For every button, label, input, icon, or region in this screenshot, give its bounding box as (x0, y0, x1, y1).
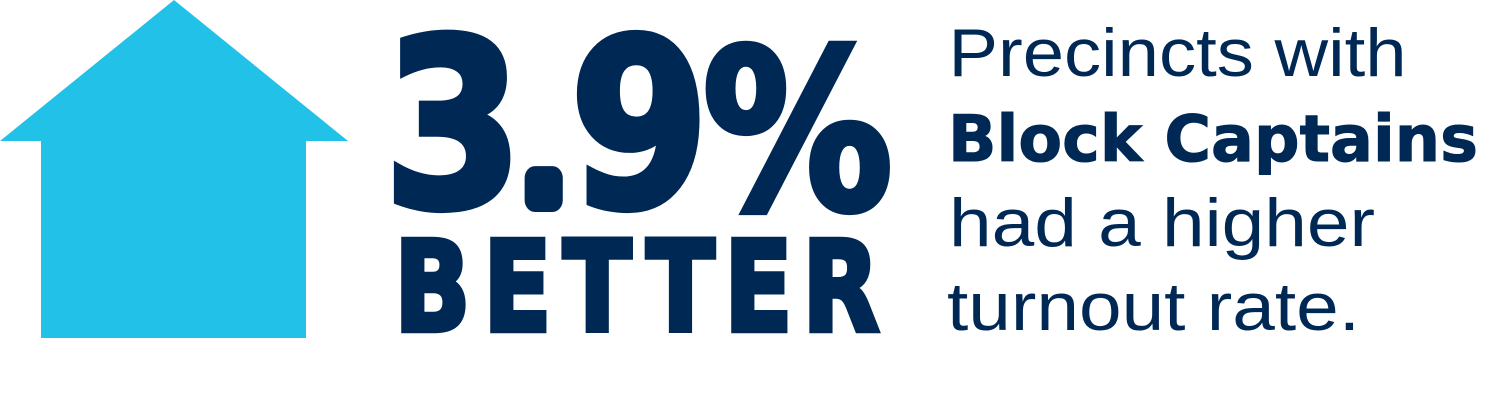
description text (947, 15, 1478, 345)
line 4: turnout rate. (947, 269, 1360, 345)
line 3: had a higher (949, 185, 1375, 261)
line 2 bold: Block Captains (948, 103, 1478, 177)
big number: % (703, 5, 893, 261)
label: better: BETTER (394, 215, 879, 360)
icon: house (0, 0, 348, 338)
line 1: Precincts with (948, 15, 1406, 91)
big number: . (525, 93, 563, 228)
